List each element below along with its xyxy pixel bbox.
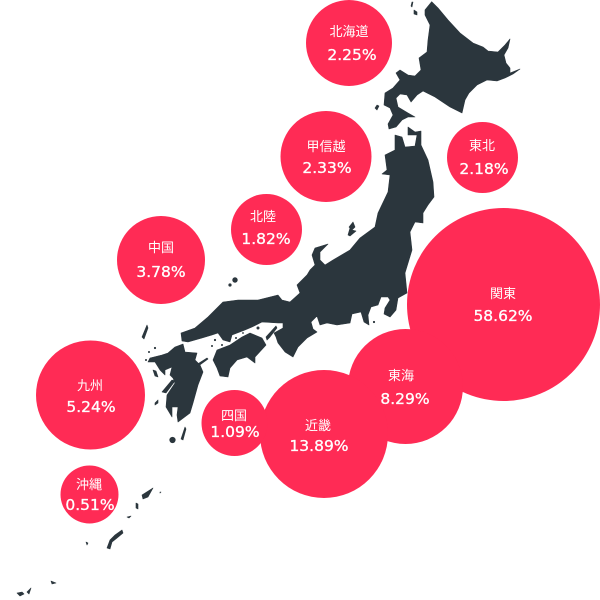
bubble: 関東	[407, 208, 600, 401]
Honshu	[181, 127, 434, 357]
bubble: 甲信越	[280, 111, 372, 202]
small islands	[348, 222, 356, 236]
label: 四国 1.09%: 四国	[221, 408, 247, 423]
label: 関東 58.62%: 関東	[490, 286, 516, 301]
label: 関東 58.62%	[473, 286, 533, 325]
label: 中国 3.78%: 3.78%	[136, 263, 186, 281]
label: 関東 58.62%: 58.62%	[473, 307, 533, 325]
bubble: 四国	[202, 390, 268, 456]
bubble: 北陸	[231, 194, 302, 265]
bubble: 九州	[36, 340, 145, 450]
label: 北海道 2.25%: 北海道	[329, 24, 369, 39]
label: 四国 1.09%	[210, 408, 260, 441]
label: 沖縄 0.51%: 0.51%	[65, 496, 115, 514]
Hokkaido	[384, 2, 520, 129]
label: 沖縄 0.51%: 沖縄	[76, 477, 102, 492]
Nansei islands	[142, 488, 153, 499]
label: 四国 1.09%: 1.09%	[210, 423, 260, 441]
label: 北海道 2.25%	[327, 24, 377, 64]
label: 九州 5.24%	[66, 378, 116, 416]
label: 九州 5.24%: 5.24%	[66, 398, 116, 416]
label: 東海 8.29%: 8.29%	[380, 390, 430, 408]
bubble: 東北	[447, 122, 518, 193]
label: 近畿 13.89%	[289, 418, 349, 455]
label: 東北 2.18%	[459, 138, 509, 178]
Kyushu	[148, 344, 203, 422]
label: 東海 8.29%	[380, 368, 430, 408]
label: 甲信越 2.33%	[302, 139, 352, 177]
bubble: 近畿	[260, 370, 388, 498]
label: 東北 2.18%: 東北	[469, 138, 495, 153]
label: 近畿 13.89%: 13.89%	[289, 437, 349, 455]
label: 中国 3.78%: 中国	[148, 240, 174, 255]
bubble: 北海道	[306, 0, 392, 86]
label: 九州 5.24%: 九州	[77, 378, 103, 393]
label: 沖縄 0.51%	[65, 477, 115, 514]
label: 北陸 1.82%: 1.82%	[241, 230, 291, 248]
label: 東北 2.18%: 2.18%	[459, 160, 509, 178]
bubble: 中国	[117, 216, 205, 304]
label: 東海 8.29%: 東海	[388, 368, 414, 383]
bubble: 東海	[348, 329, 463, 444]
Shikoku	[213, 333, 266, 377]
label: 甲信越 2.33%: 2.33%	[302, 159, 352, 177]
bubble: 沖縄	[60, 466, 118, 524]
label: 甲信越 2.33%: 甲信越	[306, 139, 346, 154]
label: 近畿 13.89%: 近畿	[305, 418, 331, 433]
label: 北陸 1.82%: 北陸	[250, 209, 276, 224]
label: 中国 3.78%	[136, 240, 186, 281]
label: 北陸 1.82%	[241, 209, 291, 248]
label: 北海道 2.25%: 2.25%	[327, 46, 377, 64]
